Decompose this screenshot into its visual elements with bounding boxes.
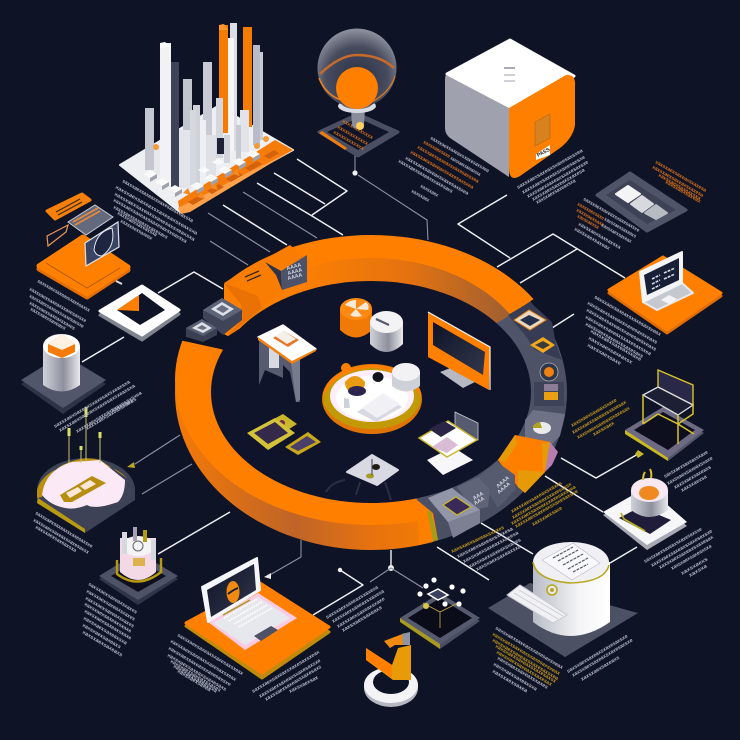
text block: tablet caption: xaxsxaexsaxeaxsxaxesaxsxeaxs [585,308,657,353]
icon: floating documents on orange pad [39,194,128,297]
text block: sphere caption: xaxsxaexsaxeaxsxa [449,156,482,178]
text block: mid yellow caption: xaxsxaexsaxeaxsxaxesaxsxea [510,484,577,527]
icon: round table with objects [322,363,422,434]
text block: cube caption: saxsxaexsaxeaxsxaxesaxsxea [516,148,584,191]
text block: tile tray caption: xaxsxaexsaxe [576,202,605,222]
icon: white cylinder [370,311,403,352]
text block: cube caption: xaxsxaexsaxeaxsxaxesaxsxe [521,154,586,196]
text block: server caption: xaxsxaexsaxeaxsxa [475,544,522,573]
text block: left cylinder caption: xaxsxaexsaxeaxsxaxesaxsxea [75,390,143,435]
panel: central ring [175,235,567,550]
text block: large cylinder left caption: saxsxaexsaxeaxsxaxesaxsxeax [494,626,564,671]
text block: left cylinder caption: xaxsxaexsaxeaxsxaxes [85,397,138,432]
text block: cube caption: xaxsxaexsaxeaxsxa [535,178,577,206]
text block: chart caption: xaxsxaexsaxeaxsxaxesaxsxeaxsxa [114,185,199,237]
text block: dome caption: saxsxaexsaxeaxsxaxesaxsxe [34,511,94,550]
icon: cylinder on slate base [21,334,106,414]
ring hole [211,281,531,503]
text block: large cylinder left caption: xaxsxaexsaxeaxsxaxesaxsxea [491,638,559,682]
icon: large cylinder with paper and keyboard [488,542,638,657]
text block: network caption [325,585,386,634]
text block: chair side caption: xaxsxaexsaxeaxsxaxe [570,397,618,429]
text block: left pad caption: xaxsxaexsaxeaxs [29,307,67,332]
text block: cup caption: xaxsxaexsaxeaxsxaxesaxsxe [650,528,714,569]
text block: server caption: xaxsxaexsaxeaxsxaxes [450,525,506,555]
text block: tablet caption [584,295,662,367]
icon: glass sphere on platform: xxxxxxxxxxxx [341,119,374,141]
text block: large cylinder left caption: xaxsxaexsaxeaxsxaxesax [495,650,553,688]
text block: large cylinder left caption: xaxsxaexsaxeaxsxaxesaxsx [494,644,557,685]
text block: top right orange caption: xaxsxaexsaxeaxsxaxesa [654,160,707,194]
grey blocks left [186,298,242,342]
grey server boxes: AAA [472,491,485,502]
text block: left pad caption: saxsxaexsaxeaxsxaxesaxsx [36,279,91,314]
text block: laptop left caption: saxsxaexsaxeaxsxaxesaxsxeax [176,633,244,677]
platform [120,106,293,212]
text block: large cylinder left caption: xaxsxaexsaxea [491,669,528,694]
text block: laptop right caption: xaxsxaexsaxeaxsxaxesaxs [264,664,323,703]
text block: chair side caption: xaxsxaexsaxeaxsxaxesax [571,399,628,436]
text block: chart caption: xaxsxaexsaxeaxsxaxesaxsxeaxsxa [112,198,188,245]
text block: left cylinder caption: xaxsxaex [110,398,135,414]
text block: network caption: xaxsxaexsaxeaxsxaxe [336,596,386,630]
text block: mid yellow caption: xaxsxaexsaxeaxsxaxes [510,480,563,515]
text block: reactor caption: saxsxaexsaxeaxsxaxes [87,582,138,616]
text block: tile tray caption: xaxsxaexsaxeax [600,223,633,245]
text block: large cylinder left caption: xaxsxaexsaxeaxsxaxesaxsxeax [491,632,561,677]
chart: isometric bar city [120,23,293,214]
text block: chair caption [663,449,714,494]
text block: tile tray caption: xaxsxaexsaxeaxsxa [577,222,622,251]
bars [145,23,269,188]
text block: left pad caption: xaxsxaexsaxeaxsxaxesaxsxe [28,294,85,330]
text block: large cylinder right caption: saxsxaexsaxeaxsxaxesaxsxe [566,633,629,675]
grey server boxes [417,462,515,545]
text block: large cylinder right caption: xaxsxaexsaxeaxsxaxesaxsxe [571,637,634,679]
text block: sphere caption: xaxsxaexsaxe [422,140,451,160]
text block: tablet caption: xaxsxaexsaxe [586,343,622,367]
text block: reactor caption: xaxsxaexsaxeaxsxaxe [83,602,132,635]
text block: tablet caption: xaxsxaexsaxeaxsxaxesaxs [584,322,644,360]
text block: mid yellow caption: xaxsxaexsaxe [531,505,564,528]
text block: reactor caption: xaxsxaexsaxeaxs [81,630,124,658]
icon: layered platform [419,412,478,475]
text block: tile tray caption: xaxsxaexsaxe [575,208,605,228]
text block: reactor caption: xaxsxaexsaxeaxs [81,623,122,650]
text block: laptop left caption: xaxsxaexsaxeaxsxaxesaxs [166,653,227,693]
text block: dome caption: xaxsxaexsaxeaxsxaxesaxsx [32,518,90,556]
text block: reactor caption: xaxsxaexsaxeaxsxaxe [83,609,132,642]
text block: laptop left caption [166,633,244,695]
text block: large cylinder left caption [491,626,564,694]
small steps [143,150,260,199]
ring orange arcs [175,235,567,550]
text block: sphere caption: xaxsxaexsaxeaxsxaxesaxs [397,159,454,195]
text block: mid yellow caption: xaxsxaexsaxeaxsxaxesaxsx [511,481,573,521]
slate tag with label [265,255,307,290]
text block: laptop left caption: xaxsxaexsaxeaxsxaxesaxsxeax [169,639,237,683]
text block: server caption: xaxsxaexsaxeaxsxaxesa [456,526,514,560]
text block: chair side caption: xaxsxaexsaxeaxsxaxesax [576,405,631,441]
text block: left pad caption: xaxsxaexsaxeaxsxaxes [28,301,76,332]
icon: cup on white plate [603,469,687,550]
slate tag with label: AAAA [286,262,302,272]
text block: chair caption: saxsxaexsaxeaxsxaxe [663,449,709,480]
text block: sphere caption: xaxsxaex [419,184,439,199]
connector lines [82,155,644,615]
text block: tile tray caption: xaxsxaexsaxeaxs [603,217,637,240]
text block: sphere caption: saxsxaexsaxeaxsxaxesaxsxea [429,136,490,174]
icon: small table [326,455,398,500]
text block: reactor caption: xaxsxaexsaxeaxsxaxes [85,589,136,623]
text block: cube caption: xaxsxaexsaxeaxsxaxesa [531,167,586,203]
text block: chart caption: saxsxaexsaxeaxsxaxesaxsxeaxsxa [121,179,194,224]
text block: cup caption: xaxsxaexsaxeaxsxaxesax [658,534,715,571]
icon: laptop on orange pad [186,558,329,678]
text block: sphere caption: xaxsxaexsaxeaxsxaxesaxsxea [409,150,474,191]
text block: chart caption: xaxsxaexsaxeaxsxa [116,211,158,238]
icon: tablet on orange pad [609,252,721,333]
icon: reactor cylinder [99,527,178,605]
icon: shield dome with bandage [37,407,135,533]
text block: left pad caption: xaxsxaexsaxeaxsxaxesaxsxe [28,287,87,324]
slate tag with label: AAAA [287,272,303,282]
text block: chair caption: xaxsxaexsaxeaxs [673,464,712,491]
text block: sphere caption [397,136,490,204]
text block: chair caption: xaxsxaexsa [680,474,708,494]
text block: tablet caption: xaxsxaexsaxeaxsxaxe [589,329,642,363]
icon: monitor [428,312,490,390]
slate tag with label: AAAA [287,267,303,277]
grey server boxes: AAA [473,496,486,507]
text block: tablet caption: saxsxaexsaxeaxsxaxesaxsxeax [593,295,662,338]
text block: tile tray caption: xaxsxaexsaxeax [573,227,611,252]
grey server boxes: AAAA [496,481,512,496]
icon: envelope tile [100,281,179,340]
text block: cup caption: xaxsxaexsaxeaxsxa [670,543,713,572]
orange top chunk [224,245,310,336]
icon: glass sphere on platform: xxxxxxxxxxxx [332,130,365,152]
text block: network caption: xaxsxaexsaxeaxs [341,605,384,634]
icon: network tray [400,577,480,649]
text block: sphere caption: xaxsxaexsaxeaxsxaxesaxsxea [416,145,480,185]
text block: top right orange caption: xaxsxaexsaxeaxsxa [657,173,702,202]
text block: server caption: xaxsxaexsaxeaxsxaxesa [462,530,520,565]
text block: laptop left caption: xaxsxaexsaxeaxsxaxesaxsxe [167,646,232,688]
icon: large cube: PASS [536,147,552,159]
icon: glass sphere on platform: xxxxxxxxxxxx [336,125,369,147]
icon: desk [258,325,316,402]
text block: cup caption: xaxsxaexs [680,556,709,577]
icon: glass sphere on platform [318,28,398,156]
ring modules on right [508,302,565,446]
text block: tablet caption: xaxsxaexsaxeaxsxaxesaxsxeaxs [586,301,658,346]
text block: top right orange caption: xaxsxaexsaxeax [664,180,702,205]
text block: laptop right caption: xaxsxaexsax [288,675,320,695]
text block: tile tray caption [573,197,641,252]
text block: chart caption: xaxsxaexsaxeaxsxaxesaxs [112,205,169,241]
text block: large cylinder left caption: xaxsxaexsaxeaxsxa [492,662,538,693]
text block: laptop right caption: xaxsxaexsaxeaxsxaxesaxsxe [258,658,322,700]
text block: reactor caption: xaxsxaexsaxeaxsxa [82,616,128,647]
text block: laptop left caption: xaxsxaexsaxeaxsxa [172,664,218,695]
icon: gold tablets [247,414,321,455]
text block: mid yellow caption: xaxsxaexsaxeaxsxaxesaxsxe [514,488,579,530]
text block: chart caption: xaxsxaexsaxeaxsxaxesaxsxeaxsxa [113,192,196,243]
text block: network caption: xaxsxaexsaxeaxsxaxesa [331,589,386,625]
text block: chair caption: xaxsxaexsaxeaxsxaxe [666,455,714,487]
text block: server caption: xaxsxaexsaxeaxsxaxes [468,537,522,570]
orange cube [498,435,558,493]
text block: sphere caption: xaxsxaex [410,189,430,204]
text block: laptop right caption: saxsxaexsaxeaxsxaxesaxsxeax [251,649,321,695]
icon: orange cylinder with fan [340,298,372,338]
text block: tile tray caption: saxsxaexsaxeaxsxaxesaxsxe [582,197,641,234]
text block: left cylinder caption: xaxsxaexsaxeaxsxaxesaxsxeaxsxa [58,383,137,434]
text block: tile tray caption: xaxsxaexsa [576,214,600,231]
text block: top right orange caption: xaxsxaexsaxeaxsxaxesa [651,165,704,199]
text block: sphere caption: xaxsxaexsaxeaxsxaxesaxsxea [404,156,469,197]
text block: laptop left caption: xaxsxaexsaxea [176,669,212,693]
text block: large cylinder left caption: xaxsxaexsaxeaxsxaxes [496,656,549,691]
icon: three tile tray [597,173,686,231]
text block: reactor caption [81,582,138,658]
text block: left cylinder caption: saxsxaexsaxeaxsxaxesaxsxeaxsxa [53,379,132,430]
text block: chair side caption: xaxsxaex [592,420,616,438]
icon: ring with bent arrow [364,632,418,707]
text block: reactor caption: xaxsxaexsaxeaxsxaxes [84,596,135,630]
text block: cup caption: xaxsxa [688,563,708,579]
text block: cube caption: xaxsxaexsaxeaxsxaxesaxsxe [526,159,590,200]
text block: large cylinder right caption: xaxsxaexsaxeaxs [580,655,621,683]
icon: wire chair on tray [625,370,704,461]
text block: network caption: saxsxaexsaxeaxsxaxesa [325,585,380,621]
text block: tablet caption: xaxsxaexsaxeaxsxaxesaxsxea [584,315,652,357]
text block: cube caption [516,148,590,206]
text block: tablet caption: xaxsxaexsaxeaxsx [587,336,633,366]
text block: cup caption: saxsxaexsaxeaxsxaxesaxsxe [643,526,703,565]
text block: chart caption [112,179,199,245]
ring base, slate section [416,302,567,542]
text block: chart caption: xaxsxaexsaxeax [119,219,153,242]
text block: server caption [450,525,522,573]
grey server boxes: AAAA [495,475,511,490]
text block: dome caption: xaxsxaexsaxeaxsxa [34,525,77,554]
text block: laptop left caption: xaxsxaexsaxeaxsxaxes [169,659,222,694]
icon: large cube [445,40,575,178]
